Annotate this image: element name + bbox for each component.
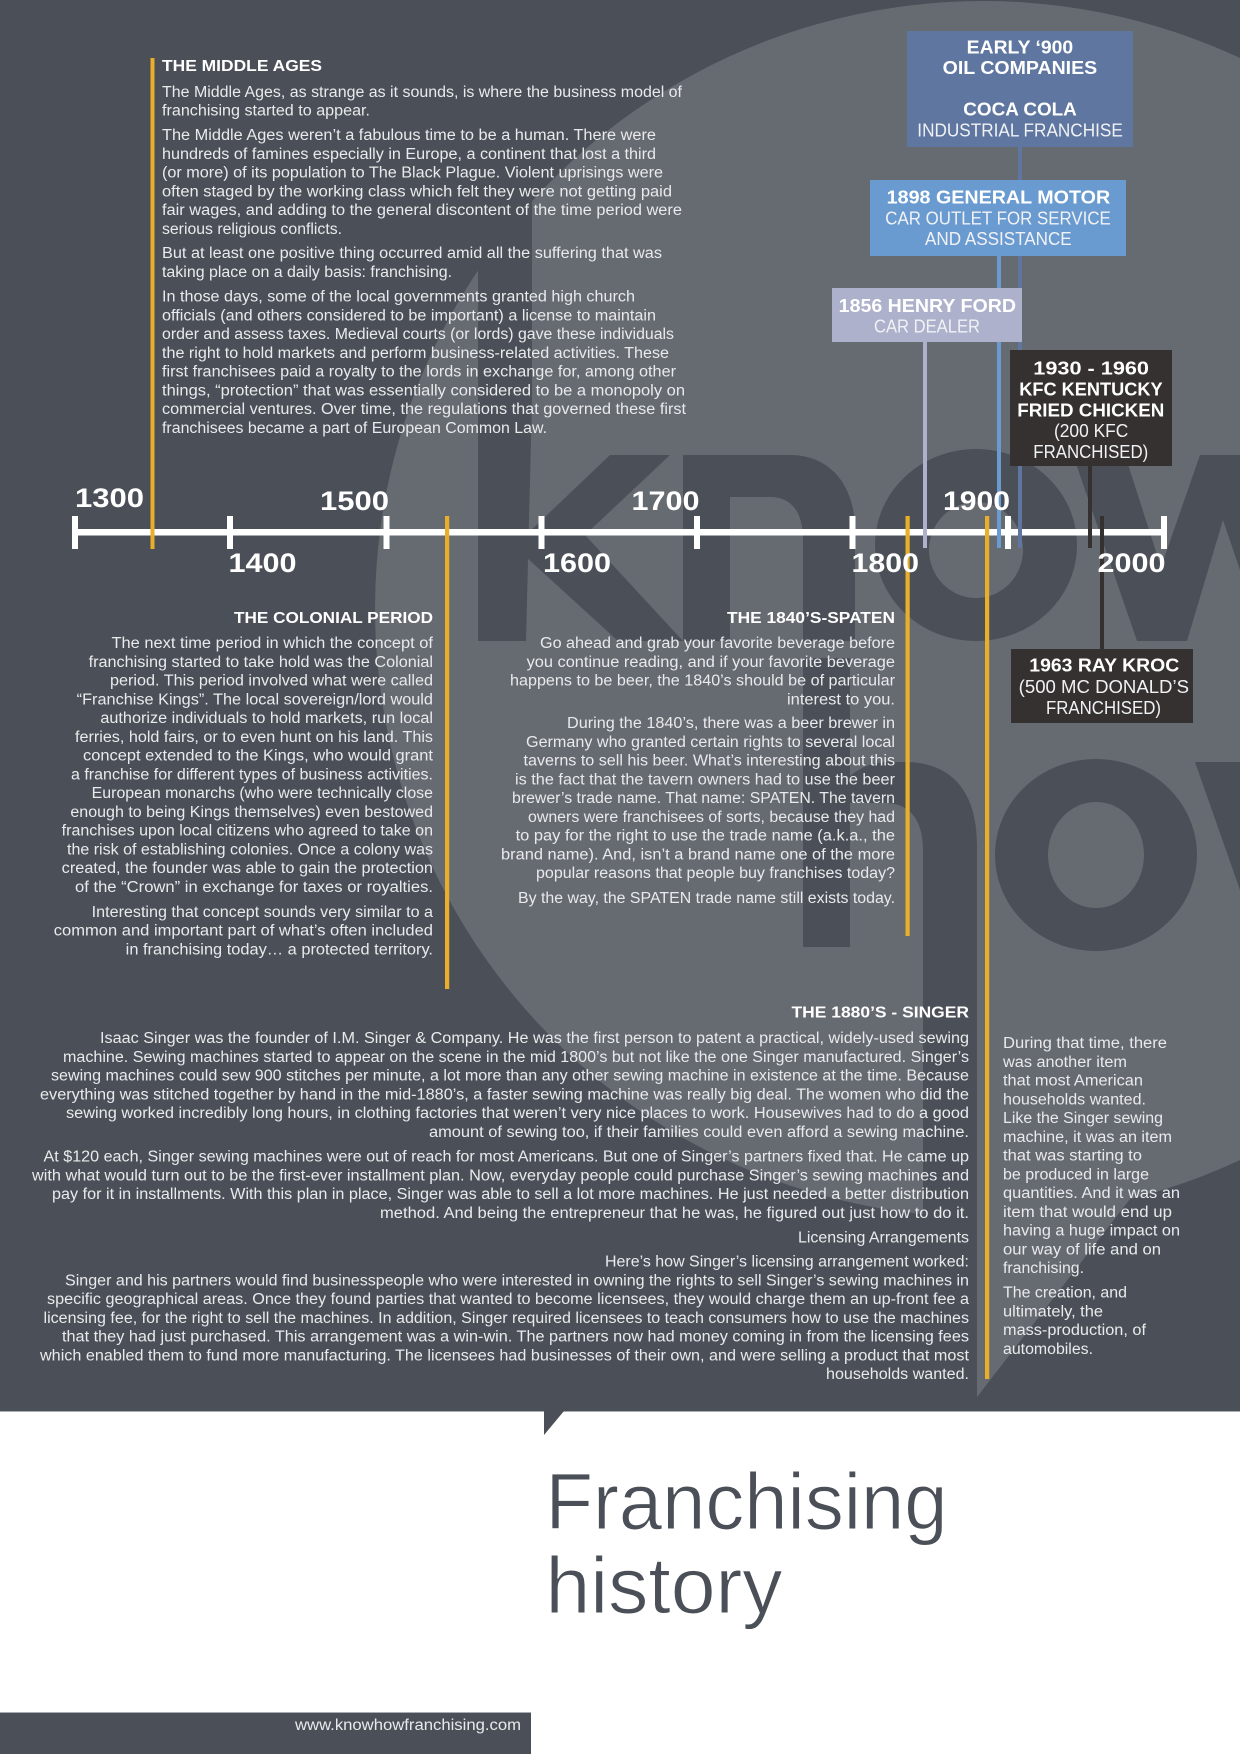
- yellow marker: 1880s singer: [985, 516, 989, 1379]
- year labels: 2000: [1098, 548, 1166, 578]
- connector: general motor: [997, 256, 1001, 548]
- text block: the 1880s singer: [31, 1004, 970, 1383]
- year labels: 1900: [943, 486, 1010, 516]
- body: the 1840s spaten: interest to you.: [787, 691, 895, 708]
- body: the 1840s spaten: you continue reading, and if your favorite beverage: [527, 654, 895, 671]
- title: history: [546, 1541, 782, 1630]
- connector: oil companies: [1018, 147, 1022, 548]
- body: the 1880s singer: that they had just purchased. This arrangement was a win-win. The partners now had money coming in from the licensing fees: [62, 1329, 969, 1346]
- text block: the middle ages: [162, 58, 687, 437]
- body: the 1840s spaten: is the fact that the tavern owners had to use the beer: [515, 771, 895, 788]
- callout: 1963 ray kroc: 1963 RAY KROC: [1029, 656, 1179, 676]
- callout: 1963 ray kroc: (500 MC DONALD’S: [1019, 677, 1189, 697]
- body: the 1880s singer: specific geographical areas. Once they found parties that wanted to become licensees, they would charge them an up-front fee a: [47, 1291, 969, 1308]
- year labels: 1500: [320, 486, 389, 516]
- body: the 1880s singer: Isaac Singer was the founder of I.M. Singer & Company. He was the first person to patent a practical, widely-used sewing: [100, 1030, 969, 1047]
- callout: 1856 henry ford: [832, 288, 1022, 342]
- body: the middle ages: [162, 84, 687, 437]
- connector: henry ford: [923, 342, 927, 548]
- text block: automobiles side note: Like the Singer sewing: [1003, 1110, 1163, 1127]
- body: the middle ages: taking place on a daily basis: franchising.: [162, 264, 452, 281]
- body: the middle ages: hundreds of famines especially in Europe, a continent that lost a third: [162, 146, 656, 163]
- heading: the colonial period: THE COLONIAL PERIOD: [234, 610, 433, 627]
- heading: the 1880s singer: THE 1880’S - SINGER: [792, 1004, 969, 1022]
- callout: 1898 general motor: CAR OUTLET FOR SERVICE: [885, 208, 1111, 228]
- callout: 1963 ray kroc: FRANCHISED): [1046, 698, 1161, 718]
- body: the 1840s spaten: happens to be beer, the 1840’s should be of particular: [510, 672, 895, 690]
- body: the middle ages: But at least one positive thing occurred amid all the suffering that was: [162, 245, 662, 262]
- body: the 1840s spaten: brewer’s trade name. That name: SPATEN. The tavern: [512, 790, 895, 807]
- body: the 1880s singer: licensing fee, for the right to sell the machines. In addition, Singer required licensees to teach consumers how to use the machines: [44, 1310, 969, 1327]
- title: [546, 1457, 948, 1630]
- connector: kfc: [1088, 466, 1092, 548]
- callout: kfc: KFC KENTUCKY: [1019, 380, 1163, 400]
- body: the colonial period: in franchising today… a protected territory.: [126, 941, 433, 958]
- callout: early 1900 oil companies and coca cola: COCA COLA: [963, 100, 1077, 120]
- body: the 1880s singer: At $120 each, Singer sewing machines were out of reach for most Americans. But one of Singer’s partners fixed that. He came up: [44, 1149, 969, 1166]
- body: the middle ages: In those days, some of the local governments granted high church: [162, 289, 635, 306]
- body: the colonial period: the risk of establishing colonies. Once a colony was: [67, 841, 433, 858]
- text block: automobiles side note: machine, it was an item: [1003, 1129, 1172, 1146]
- body: the middle ages: order and assess taxes. Medieval courts (or lords) gave these individuals: [162, 326, 674, 343]
- body: the middle ages: franchising started to appear.: [162, 102, 370, 120]
- text block: automobiles side note: was another item: [1002, 1054, 1127, 1071]
- yellow marker: 1840s spaten: [906, 516, 910, 936]
- body: the 1840s spaten: taverns to sell his beer. What’s interesting about this: [524, 752, 895, 770]
- year labels: 1600: [543, 548, 611, 578]
- callout: kfc: FRIED CHICKEN: [1017, 401, 1164, 421]
- body: the colonial period: franchising started to take hold was the Colonial: [89, 654, 433, 671]
- text block: automobiles side note: quantities. And it was an: [1003, 1185, 1180, 1202]
- text block: automobiles side note: that was starting to: [1003, 1148, 1142, 1164]
- text block: automobiles side note: households wanted.: [1003, 1091, 1146, 1108]
- body: the 1880s singer: pay for it in installments. With this plan in place, Singer was able to sell a lot more machines. He just needed a better distribution: [52, 1186, 969, 1203]
- callout: kfc: 1930 - 1960: [1033, 359, 1149, 379]
- callout: 1963 ray kroc: [1011, 649, 1193, 723]
- callout: 1856 henry ford: CAR DEALER: [874, 317, 980, 337]
- body: the 1880s singer: Singer and his partners would find businesspeople who were interested in owning the rights to sell Singer’s sewing machines in: [65, 1272, 969, 1289]
- body: the colonial period: concept extended to the Kings, who would grant: [83, 748, 434, 764]
- text block: automobiles side note: ultimately, the: [1003, 1303, 1103, 1320]
- body: the 1880s singer: sewing machines could sew 900 stitches per minute, a lot more than any other sewing machine in existence at the time. Because: [51, 1068, 969, 1084]
- body: the middle ages: things, “protection” that was essentially considered to be a monopoly on: [162, 382, 685, 399]
- body: the 1840s spaten: popular reasons that people buy franchises today?: [536, 865, 895, 882]
- text block: automobiles side note: During that time, there: [1003, 1035, 1167, 1052]
- text block: automobiles side note: franchising.: [1003, 1260, 1084, 1277]
- body: the colonial period: created, the founder was able to gain the protection: [62, 860, 433, 877]
- body: the colonial period: enough to being Kings themselves) even bestowed: [70, 804, 433, 821]
- yellow marker: colonial period: [445, 516, 449, 989]
- text block: automobiles side note: automobiles.: [1003, 1341, 1093, 1358]
- body: the 1880s singer: everything was stitched together by hand in the mid-1880’s, a faster sewing machine was really big deal. The women who did the: [40, 1086, 969, 1103]
- callout: early 1900 oil companies and coca cola: INDUSTRIAL FRANCHISE: [917, 121, 1123, 141]
- heading: the middle ages: THE MIDDLE AGES: [162, 58, 322, 75]
- body: the 1880s singer: machine. Sewing machines started to appear on the scene in the mid 1800’s but not like the one Singer manufactured. Singer’s: [63, 1049, 969, 1066]
- speech bubble shape: [375, 1, 1240, 1397]
- watermark letters: know how: [478, 100, 1240, 1300]
- body: the colonial period: franchises upon local citizens who agreed to take on: [62, 822, 433, 840]
- text block: automobiles side note: item that would end up: [1003, 1204, 1172, 1221]
- body: the 1880s singer: sewing worked incredibly long hours, in clothing factories that weren’t very nice places to work. Housewives had to do a good: [66, 1105, 969, 1122]
- body: the middle ages: often staged by the working class which felt they were not getting paid: [162, 183, 672, 200]
- body: the 1880s singer: Here’s how Singer’s licensing arrangement worked:: [605, 1254, 969, 1271]
- body: the 1840s spaten: Go ahead and grab your favorite beverage before: [540, 635, 895, 652]
- text block: automobiles side note: having a huge impact on: [1003, 1222, 1180, 1240]
- text block: automobiles side note: The creation, and: [1003, 1285, 1127, 1302]
- body: the colonial period: common and important part of what’s often included: [54, 923, 433, 940]
- body: the 1840s spaten: During the 1840’s, there was a beer brewer in: [567, 715, 895, 732]
- body: the 1880s singer: method. And being the entrepreneur that he was, he figured out just how to do it.: [380, 1205, 969, 1222]
- year labels: 1700: [632, 486, 700, 516]
- body: the 1880s singer: Licensing Arrangements: [798, 1230, 969, 1247]
- footer bar with website: www.knowhowfranchising.com: [294, 1717, 521, 1734]
- text block: automobiles side note: our way of life and on: [1003, 1241, 1161, 1258]
- body: the colonial period: European monarchs (who were technically close: [92, 785, 433, 802]
- body: the colonial period: ferries, hold fairs, or to even hunt on his land. This: [75, 729, 433, 746]
- text block: the colonial period: [54, 610, 434, 958]
- body: the colonial period: [54, 635, 434, 958]
- callout: 1898 general motor: AND ASSISTANCE: [925, 229, 1072, 249]
- body: the 1880s singer: with what would turn out to be the first-ever installment plan. Now, everyday people could purchase Singer’s sewing machines and: [31, 1167, 969, 1184]
- body: the middle ages: franchisees became a part of European Common Law.: [162, 420, 547, 437]
- callout: 1898 general motor: [870, 180, 1126, 256]
- body: the colonial period: authorize individuals to hold markets, run local: [100, 710, 433, 727]
- body: the colonial period: “Franchise Kings”. The local sovereign/lord would: [77, 691, 433, 708]
- callout: 1856 henry ford: 1856 HENRY FORD: [839, 296, 1016, 316]
- footer bar with website: [0, 1712, 531, 1754]
- timeline axis: [72, 516, 1167, 549]
- body: the middle ages: officials (and others considered to be important) a license to maintain: [162, 307, 656, 324]
- body: the colonial period: Interesting that concept sounds very similar to a: [92, 904, 433, 921]
- callout: kfc: (200 KFC: [1054, 421, 1128, 441]
- callout: kfc: FRANCHISED): [1033, 442, 1148, 462]
- body: the 1840s spaten: By the way, the SPATEN trade name still exists today.: [518, 890, 895, 907]
- text block: automobiles side note: mass-production, of: [1003, 1322, 1147, 1339]
- body: the 1880s singer: amount of sewing too, if their families could even afford a sewing machine.: [429, 1124, 969, 1141]
- body: the colonial period: a franchise for different types of business activities.: [71, 766, 433, 783]
- callout: early 1900 oil companies and coca cola: OIL COMPANIES: [943, 58, 1097, 78]
- text block: the 1840s spaten: [501, 610, 895, 907]
- body: the 1840s spaten: Germany who granted certain rights to several local: [526, 734, 895, 751]
- year labels: 1800: [852, 548, 919, 578]
- body: the middle ages: The Middle Ages, as strange as it sounds, is where the business model of: [162, 84, 683, 101]
- body: the 1840s spaten: to pay for the right to use the trade name (a.k.a., the: [516, 828, 895, 844]
- body: the middle ages: first franchisees paid a royalty to the lords in exchange for, among other: [162, 364, 676, 381]
- body: the middle ages: serious religious conflicts.: [162, 221, 342, 238]
- heading: the 1840s spaten: THE 1840’S-SPATEN: [727, 610, 895, 627]
- callout: early 1900 oil companies and coca cola: [907, 31, 1133, 147]
- body: the 1840s spaten: brand name). And, isn’t a brand name one of the more: [501, 846, 895, 863]
- year labels: 1300: [75, 483, 144, 513]
- connector: ray kroc: [1100, 516, 1104, 649]
- callout: early 1900 oil companies and coca cola: EARLY ‘900: [967, 37, 1073, 57]
- body: the middle ages: commercial ventures. Over time, the regulations that governed these first: [162, 401, 687, 418]
- body: the 1880s singer: which enabled them to fund more manufacturing. The licensees had businesses of their own, and were selling a product that most: [39, 1347, 970, 1364]
- year labels: 1400: [228, 548, 296, 578]
- body: the 1880s singer: [31, 1030, 970, 1383]
- callout: kfc: [1010, 350, 1172, 466]
- body: the 1840s spaten: owners were franchisees of sorts, because they had: [528, 809, 895, 826]
- body: the 1880s singer: households wanted.: [826, 1366, 969, 1383]
- body: the middle ages: (or more) of its population to The Black Plague. Violent uprisings were: [162, 164, 663, 182]
- text block: automobiles side note: be produced in large: [1003, 1166, 1149, 1183]
- body: the colonial period: of the “Crown” in exchange for taxes or royalties.: [75, 879, 433, 896]
- body: the colonial period: period. This period involved what were called: [110, 672, 433, 690]
- body: the 1840s spaten: [501, 635, 895, 907]
- year labels: [75, 483, 1166, 578]
- text block: automobiles side note: that most American: [1003, 1072, 1143, 1090]
- body: the middle ages: the right to hold markets and perform business-related activities. These: [162, 345, 669, 362]
- text block: automobiles side note: [1002, 1035, 1180, 1358]
- body: the colonial period: The next time period in which the concept of: [112, 635, 434, 652]
- body: the middle ages: The Middle Ages weren’t a fabulous time to be a human. There were: [162, 127, 656, 144]
- title: Franchising: [546, 1457, 948, 1546]
- body: the middle ages: fair wages, and adding to the general discontent of the time period were: [162, 202, 682, 219]
- speech tail below dark panel: [544, 1411, 564, 1435]
- callout: 1898 general motor: 1898 GENERAL MOTOR: [887, 187, 1110, 207]
- yellow marker: middle ages: [150, 58, 154, 549]
